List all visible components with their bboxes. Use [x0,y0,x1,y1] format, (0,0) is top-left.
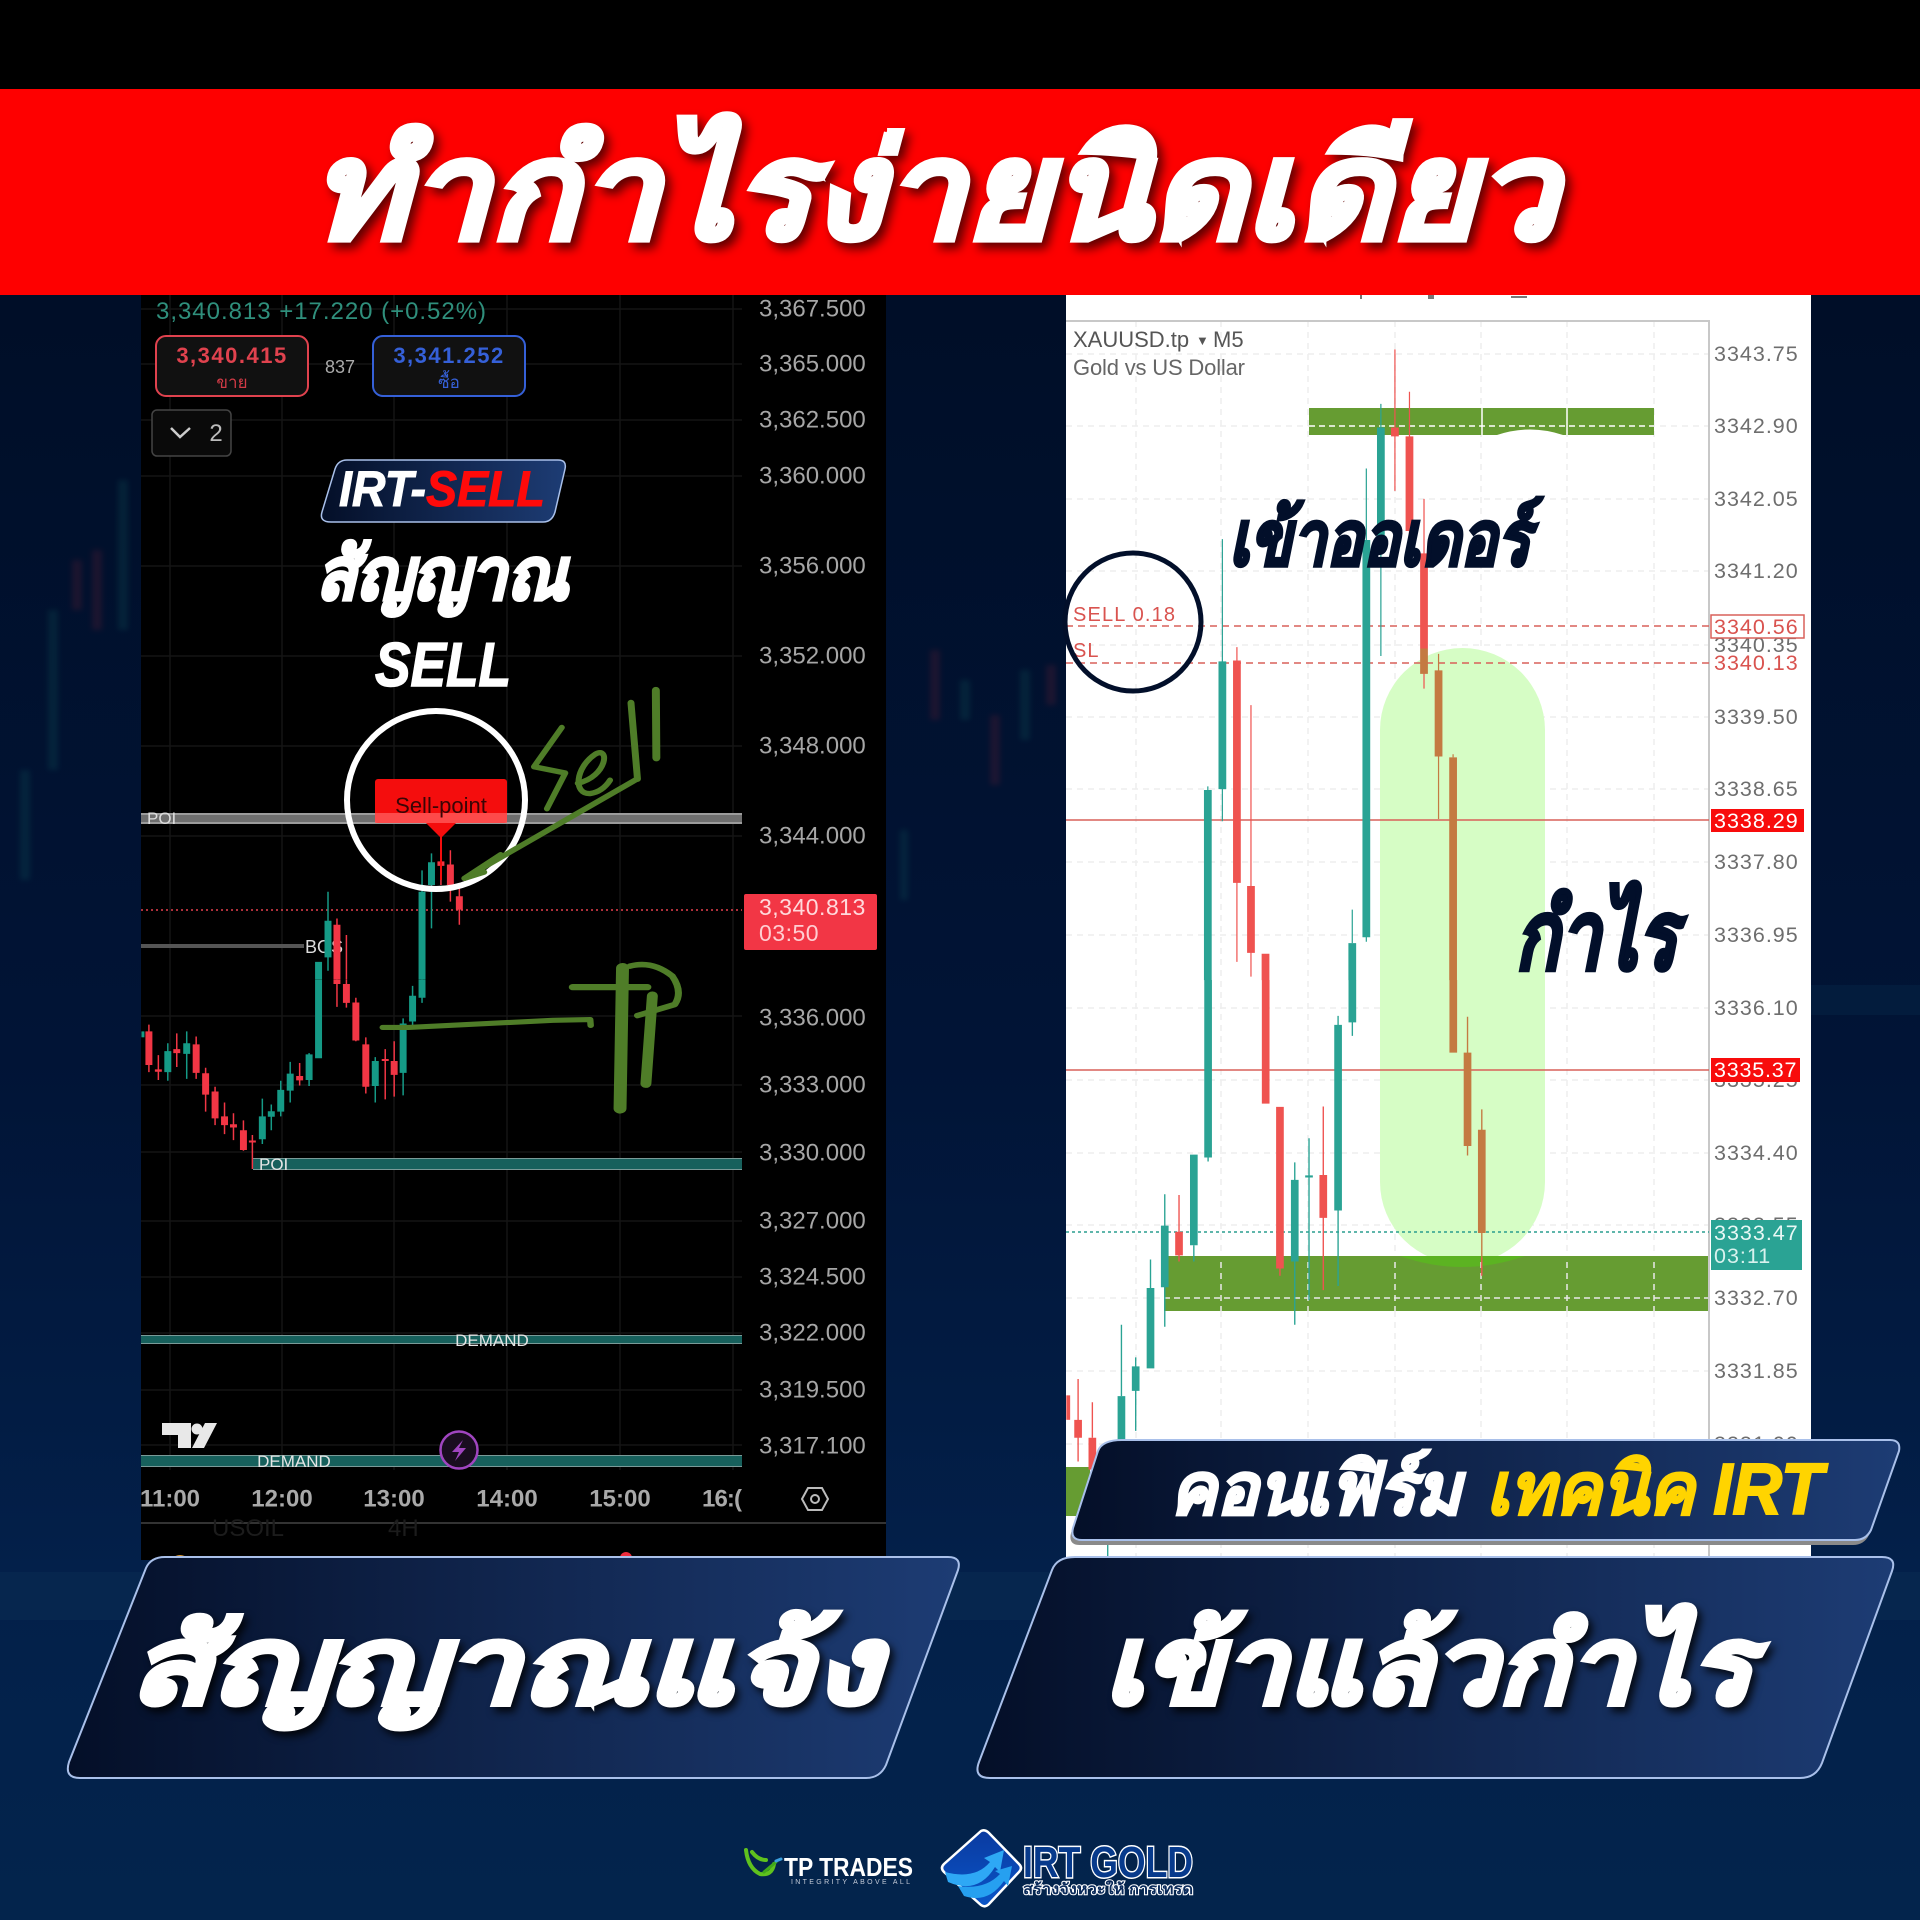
order label circle [1065,553,1201,691]
icon: settings hexagon [802,1488,828,1510]
zone: demand 1 [141,1331,742,1350]
panel: right trading chart [1065,295,1811,1560]
IRT-SELL badge: IRT-SELL [339,461,545,517]
symbol title [1073,327,1245,380]
sell button [156,336,308,396]
symbol title: M5 [1213,327,1244,352]
technique text: เทคนิค IRT [1486,1450,1829,1530]
icon: blue diamond with arrows [942,1830,1021,1906]
logo: TP Trades: TP TRADES [784,1852,913,1882]
price axis labels: 3331.85 [1714,1359,1799,1383]
cropped header fragments [1360,295,1527,299]
order label circle: SL [1073,640,1099,662]
faded symbol text: 4H [388,1515,419,1542]
quote line: 3,340.813 +17.220 (+0.52%) [156,298,486,325]
price axis labels [1714,342,1799,1456]
dropdown [152,410,231,456]
logo: IRT Gold [942,1830,1193,1906]
zone: POI supply [141,809,742,828]
price axis labels: 3332.70 [1714,1286,1799,1310]
time axis labels: 16:( [702,1486,742,1512]
confirm badge [1070,1440,1899,1545]
candlesticks upper [319,837,459,980]
current price label: 3,340.813 [759,894,866,920]
price axis labels: 3,348.000 [759,732,866,760]
time axis labels: 12:00 [251,1486,313,1512]
buy button [373,336,525,396]
buy button: ซื้อ [438,370,460,392]
faded symbol text: USOIL [212,1515,284,1542]
price axis labels: 3334.40 [1714,1141,1799,1165]
price axis labels: 3340.35 [1714,633,1799,657]
price axis labels: 3343.75 [1714,342,1799,366]
signal alert text: สัญญาณแจ้ง [129,1605,889,1730]
bottom left panel [68,1557,959,1778]
zone: lower left [1066,1467,1090,1516]
price axis labels: 3338.65 [1714,777,1799,801]
time axis labels: 11:00 [140,1486,200,1512]
zone: POI supply: POI [147,809,176,828]
sell point marker [375,779,507,880]
price axis labels: 3,333.000 [759,1072,866,1098]
chart frame [1066,321,1709,1560]
current price label [744,894,877,950]
BOS line [141,937,343,957]
symbol title: ▼ [1196,333,1209,348]
price axis labels: 3,367.500 [759,296,866,322]
price axis labels: 3342.05 [1714,487,1799,511]
price marker line [141,909,742,911]
price tag: 3333.47: 3333.47 [1714,1221,1799,1245]
faded symbol text [212,1515,419,1542]
annotation: enter order: เข้าออเดอร์ [1229,497,1544,582]
price axis labels: 3,319.500 [759,1376,866,1404]
sell point marker: Sell-point [395,793,487,818]
time axis labels: 14:00 [476,1486,538,1512]
time axis labels: 13:00 [363,1486,425,1512]
bottom right panel [977,1557,1893,1778]
price axis labels: 3,362.500 [759,406,866,434]
logo: TP Trades: INTEGRITY ABOVE ALL [791,1879,910,1886]
entered profit text: เข้าแล้วกำไร [1104,1604,1768,1726]
symbol title: XAUUSD.tp [1073,327,1189,352]
price axis labels: 3342.90 [1714,414,1799,438]
top black strip [0,0,1920,89]
price axis labels: 3,344.000 [759,822,866,850]
highlight circle [347,711,525,889]
candlesticks lower [1068,980,1482,1557]
zone: demand 2 [141,1452,742,1471]
zone: demand 2: DEMAND [257,1452,331,1471]
left heading: SELL: SELL [375,631,511,700]
zone: POI demand: POI [259,1155,288,1174]
zone: POI demand [253,1155,742,1174]
panel: left trading chart [140,295,886,1577]
price tag: 3338.29: 3338.29 [1714,809,1799,833]
price tag: 3333.47 [1711,1220,1802,1270]
candlesticks lower [143,980,422,1169]
time axis labels [140,1486,742,1512]
price axis labels: 3,330.000 [759,1140,866,1166]
zone: supply [1309,408,1654,435]
title: ทำกำไรง่ายนิดเดียว [311,113,1565,267]
icon: lightning circle [440,1432,478,1468]
price axis labels: 3,352.000 [759,642,866,670]
price tag: 3340.56: 3340.56 [1714,615,1799,639]
current price label: 03:50 [759,920,819,946]
price lines [1066,626,1709,1232]
price tag: 3333.47: 03:11 [1714,1244,1771,1268]
symbol title: Gold vs US Dollar [1073,355,1245,380]
candlesticks upper [1208,349,1453,980]
logo: IRT Gold: สร้างจังหวะให้ การเทรด [1023,1880,1193,1898]
buy button: 3,341.252 [393,343,505,368]
price axis labels: 3341.20 [1714,559,1799,583]
handwritten TP annotation [383,965,678,1108]
confirm text: คอนเฟิร์ม [1170,1449,1465,1530]
order label circle: SELL 0.18 [1073,604,1175,626]
zone: demand [1164,1256,1708,1311]
chart grid [1066,321,1709,1560]
logo: IRT Gold: IRT GOLD [1023,1838,1193,1887]
logo: TP Trades [746,1850,913,1886]
sell button: ขาย [216,373,248,392]
price tag: 3340.13: 3340.13 [1714,651,1799,675]
price axis labels: 3,360.000 [759,462,866,490]
zone: demand 1: DEMAND [455,1331,529,1350]
price axis labels: 3337.80 [1714,850,1799,874]
annotation: profit: กำไร [1515,881,1687,990]
price axis labels: 3,365.000 [759,350,866,378]
title banner [0,89,1920,295]
dropdown: 2 [209,420,223,447]
handwritten Sell annotation with arrow [464,690,656,878]
price axis labels: 3,322.000 [759,1320,866,1346]
spread value: 837 [325,357,355,377]
price axis labels: 3,336.000 [759,1004,866,1032]
price axis labels: 3336.95 [1714,923,1799,947]
price axis labels: 3,327.000 [759,1208,866,1234]
price axis labels: 3,324.500 [759,1264,866,1290]
price axis labels [759,296,866,1460]
profit highlight pill [1380,648,1545,1264]
price axis labels: 3331.00 [1714,1432,1799,1456]
icon: green leaf bird [746,1850,781,1874]
price axis labels: 3333.55 [1714,1213,1799,1237]
left heading: signal: สัญญาณ [316,535,570,617]
price axis labels: 3,317.100 [759,1432,866,1460]
sell button: 3,340.415 [176,343,288,368]
time axis labels: 15:00 [589,1486,651,1512]
price tag: 3335.37: 3335.37 [1714,1058,1797,1082]
chart grid [141,295,742,1470]
price axis labels: 3,356.000 [759,552,866,580]
BOS line: BOS [305,937,343,957]
price axis labels: 3335.25 [1714,1068,1799,1092]
price axis labels: 3339.50 [1714,705,1799,729]
logo: TradingView [162,1423,217,1448]
price axis labels: 3336.10 [1714,996,1799,1020]
